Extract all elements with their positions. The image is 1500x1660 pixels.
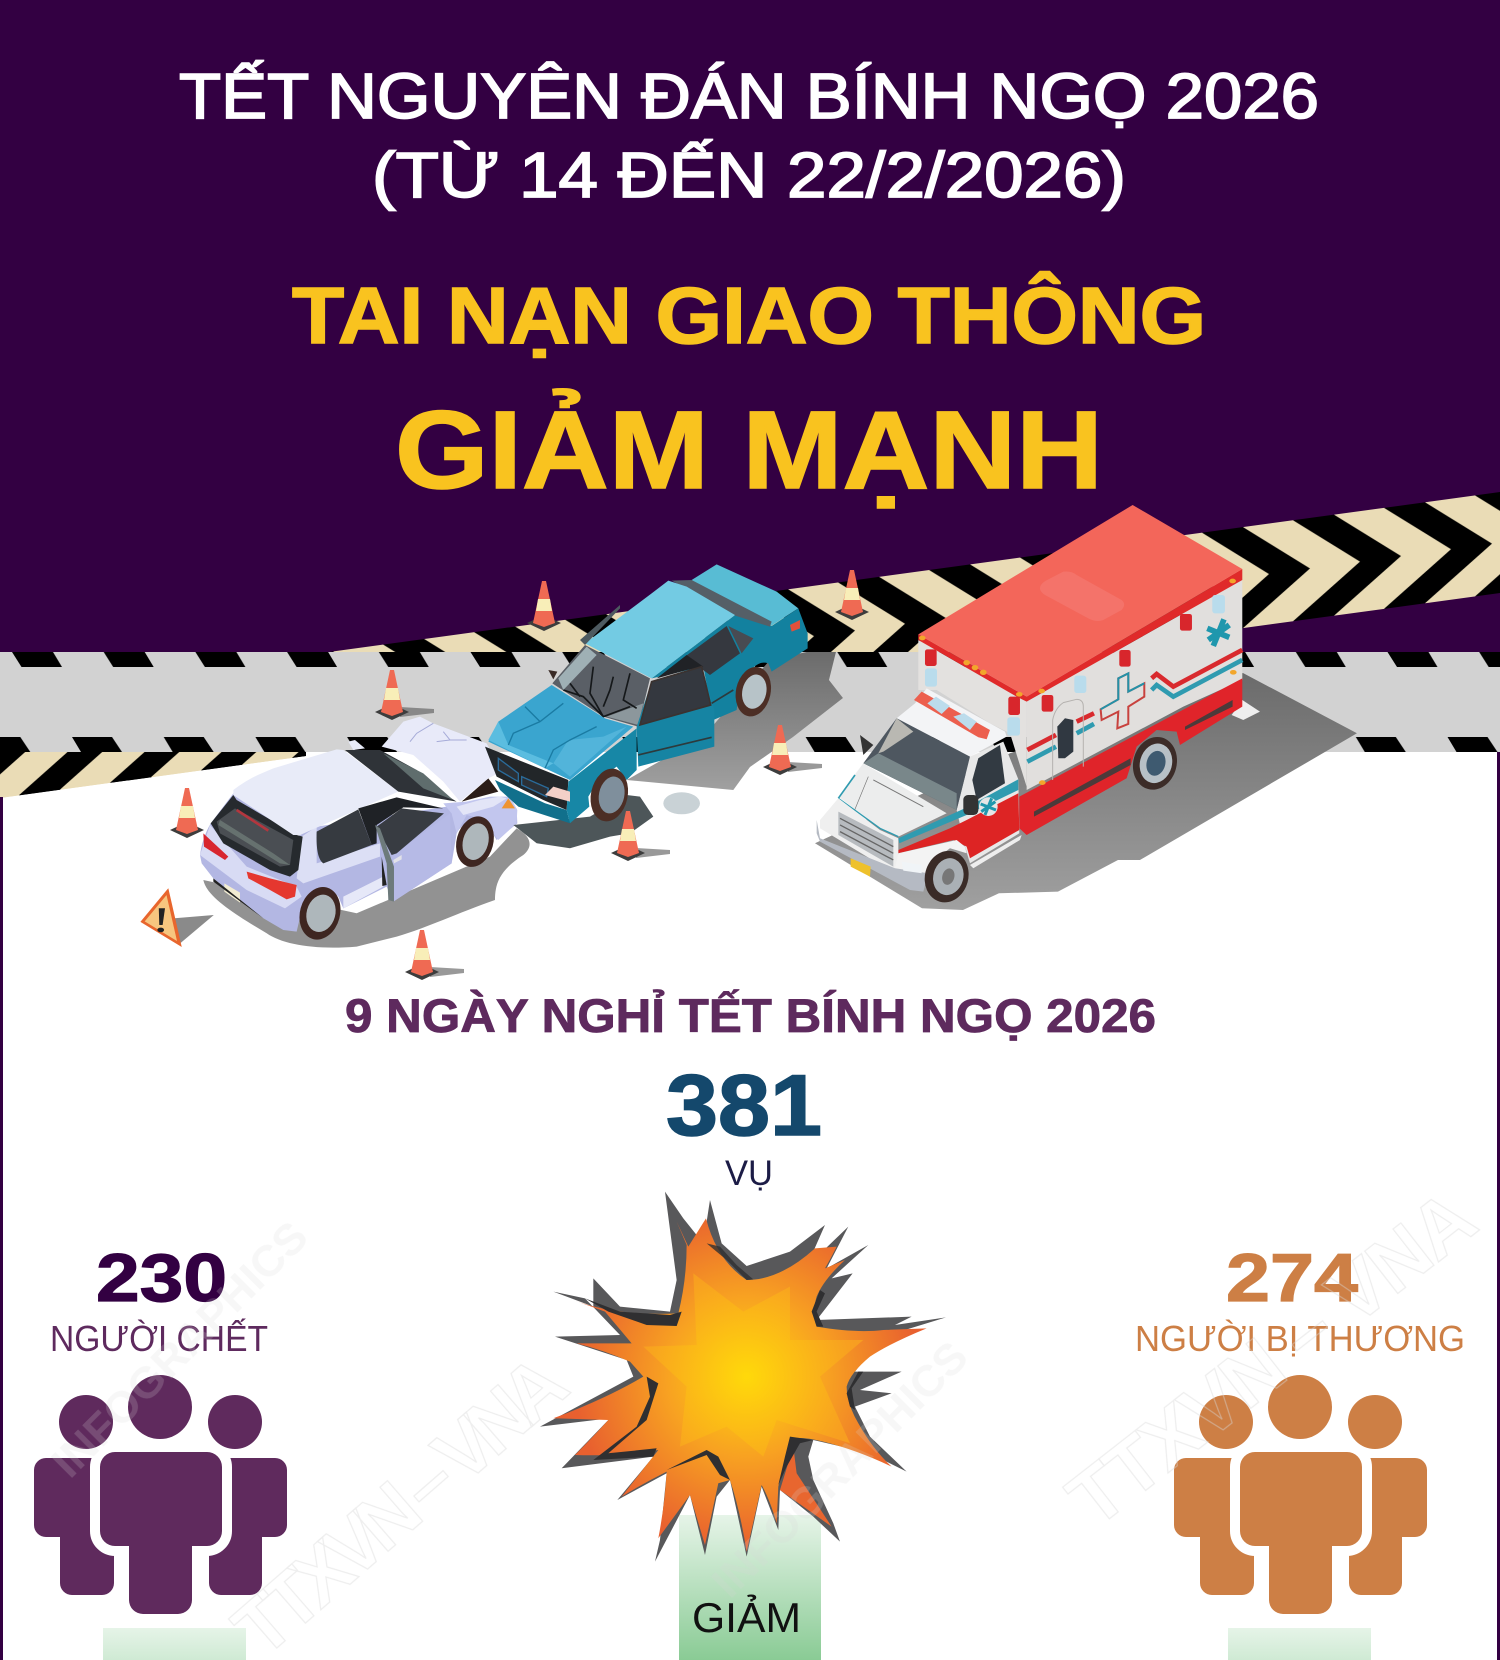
illustration: ambulance <box>815 505 1357 910</box>
white lower panel <box>0 752 1500 1660</box>
green bar: deaths base <box>103 1628 246 1660</box>
watermarks: INFOGRAPHICS <box>702 1332 977 1607</box>
stat: injured: NGƯỜI BỊ THƯƠNG <box>1135 1318 1465 1359</box>
headline <box>292 271 1206 512</box>
green bar: injured base <box>1228 1628 1371 1660</box>
stat: injured: 274 <box>1226 1240 1358 1316</box>
stat: deaths: NGƯỜI CHẾT <box>50 1318 268 1359</box>
headline: TAI NẠN GIAO THÔNG <box>292 271 1206 360</box>
green bar: decrease label <box>679 1515 821 1660</box>
watermarks <box>42 1172 1492 1660</box>
subtitle: nine holiday days: 9 NGÀY NGHỈ TẾT BÍNH NGỌ 2026 <box>345 989 1156 1042</box>
watermarks: TTXVN – VNA <box>1051 1172 1492 1543</box>
headline: GIẢM MẠNH <box>395 389 1103 512</box>
illustration: blue car <box>485 564 843 848</box>
stat: deaths <box>50 1240 268 1359</box>
stat: 381 accidents: 381 <box>666 1058 822 1154</box>
traffic cones <box>170 570 869 980</box>
green bar: decrease label: GIẢM <box>692 1593 801 1641</box>
road band <box>0 652 1500 752</box>
purple header background <box>0 0 1500 652</box>
icon: warning triangle <box>143 892 214 944</box>
watermarks: INFOGRAPHICS <box>42 1212 317 1487</box>
icon: explosion <box>540 1192 946 1562</box>
stat: deaths: 230 <box>96 1240 227 1316</box>
diagonal chevron tape <box>0 492 1500 798</box>
stat: 381 accidents: VỤ <box>725 1154 773 1193</box>
title: holiday dates: TẾT NGUYÊN ĐÁN BÍNH NGỌ 2026 <box>179 60 1319 132</box>
stat: injured <box>1135 1240 1465 1359</box>
illustration: white car <box>200 717 530 948</box>
icon: people group purple <box>34 1375 287 1614</box>
title: holiday dates: (TỪ 14 ĐẾN 22/2/2026) <box>372 139 1126 211</box>
icon: people group orange <box>1174 1375 1427 1614</box>
stat: 381 accidents <box>666 1058 822 1193</box>
title: holiday dates <box>179 60 1319 211</box>
